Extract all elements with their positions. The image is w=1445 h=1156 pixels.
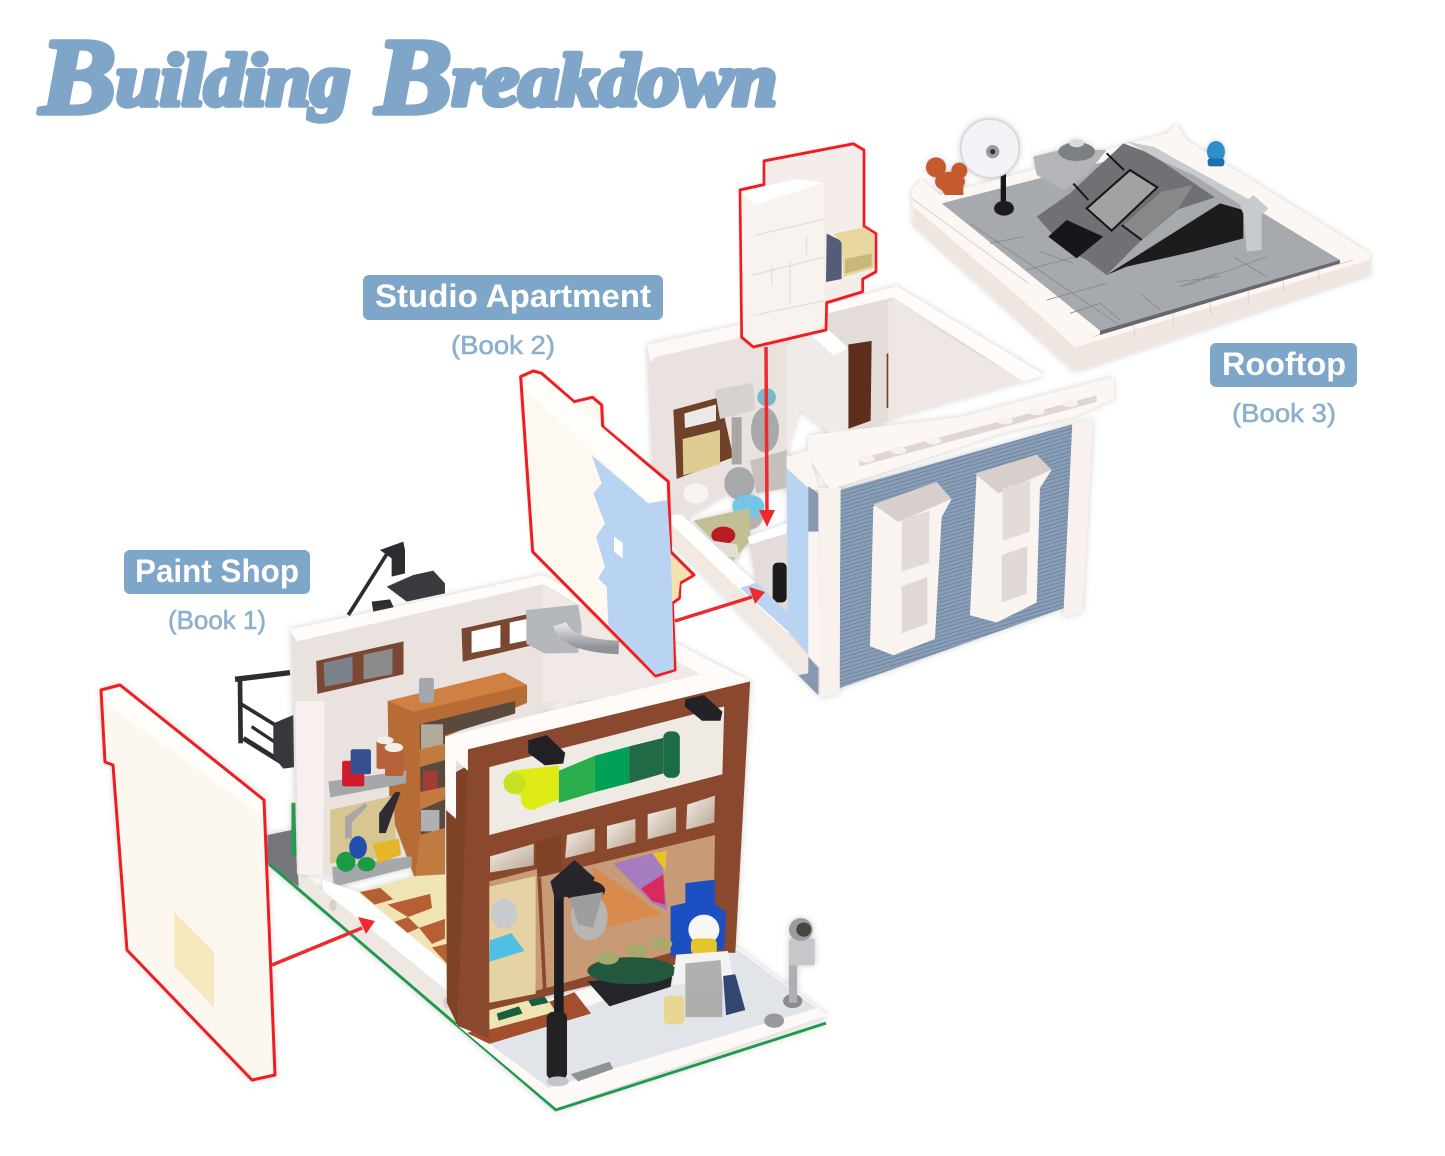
label: Studio Apartment: Studio Apartment <box>375 278 651 314</box>
planter <box>587 938 676 1006</box>
lifted wall: studio apartment <box>521 371 694 676</box>
shop floor brown <box>467 992 591 1044</box>
parapet seam <box>912 198 1353 337</box>
title: uilding <box>116 40 350 122</box>
minifigure <box>664 915 745 1024</box>
sign board <box>489 706 724 835</box>
lifted wall: bathroom partition <box>740 144 876 347</box>
back wall cap <box>647 324 742 363</box>
checker floor <box>358 874 447 965</box>
sidewalk white border <box>456 947 828 1108</box>
left window <box>316 641 404 694</box>
interior right wall <box>888 301 1023 419</box>
title <box>39 18 777 137</box>
grey blue corner pieces <box>808 486 818 532</box>
bookcase <box>388 672 527 880</box>
left pilaster <box>295 701 325 876</box>
bathroom window <box>673 397 733 479</box>
upper wall cap <box>827 286 1045 382</box>
roof outer parapet <box>912 123 1370 372</box>
base green edge <box>269 864 826 1110</box>
parking meter <box>783 918 815 1008</box>
title: reakdown <box>452 40 777 122</box>
roof grooves <box>1072 153 1157 240</box>
street behind <box>267 830 299 887</box>
back wall cap <box>290 575 750 681</box>
low left wall <box>672 523 810 675</box>
duct <box>526 605 619 654</box>
paint shop floor model <box>267 575 828 1110</box>
mailbox <box>671 880 726 956</box>
caption: Book 2: (Book 2) <box>451 330 555 360</box>
paint stripe yellow <box>503 765 559 810</box>
lower cream board <box>330 796 397 864</box>
left pilaster <box>818 488 841 698</box>
wall pin holes <box>329 900 450 1009</box>
low left wall <box>299 874 458 1026</box>
rooftop model <box>912 119 1370 372</box>
door frame line <box>539 878 545 992</box>
door pillar <box>536 835 561 878</box>
right window <box>462 614 530 662</box>
arrow: paint shop wall <box>272 917 375 965</box>
caption: Book 3: (Book 3) <box>1232 398 1336 428</box>
lifted wall: paint shop <box>101 685 275 1080</box>
roof slopes <box>1037 143 1215 275</box>
interior right wall <box>543 585 700 703</box>
label: Rooftop: Rooftop <box>1222 346 1346 382</box>
black hydrant figure <box>773 563 787 603</box>
back wall left <box>647 315 788 524</box>
window two <box>970 455 1052 623</box>
squirrel <box>926 157 967 195</box>
title: B <box>39 18 116 137</box>
toilet cistern and seat <box>715 383 755 419</box>
lower shelf items <box>332 792 412 887</box>
rear wall and door <box>827 299 888 439</box>
plunger <box>711 527 735 544</box>
skylight white edge <box>1127 142 1250 207</box>
caption: Book 1: (Book 1) <box>168 605 266 635</box>
label: Rooftop <box>1210 343 1357 387</box>
blue siding facade <box>840 424 1072 688</box>
brown facade <box>458 681 750 1039</box>
shop window interior <box>489 835 715 1003</box>
roof deck tile lines <box>970 223 1267 323</box>
white corner top <box>787 450 818 490</box>
window one <box>870 482 952 655</box>
paint stripe greens <box>559 731 680 803</box>
sidewalk paving <box>489 949 817 1088</box>
cornice dentils <box>859 400 1078 463</box>
upper window row <box>490 796 715 872</box>
satellite dish <box>961 119 1019 216</box>
sidewalk disc <box>764 1014 784 1028</box>
crane rig behind paint shop <box>235 542 445 769</box>
roof wedge dark side <box>1107 203 1243 275</box>
back wall <box>291 585 556 876</box>
arrow: studio blue wall <box>675 587 765 621</box>
sign clamps <box>528 695 722 765</box>
partition wall <box>787 334 848 452</box>
paint cans <box>342 736 404 786</box>
chimney post <box>1240 195 1268 252</box>
roof deck <box>942 148 1340 331</box>
street grate <box>571 1062 613 1081</box>
studio apartment floor model <box>647 286 1114 698</box>
blue low wall stripe <box>740 583 788 632</box>
white corner <box>445 674 750 819</box>
roof vent box <box>1033 150 1107 190</box>
cornice <box>808 377 1114 492</box>
upper grey shelf <box>328 771 406 797</box>
right pilaster <box>1063 419 1093 617</box>
bathroom floor <box>693 508 750 561</box>
blue bird <box>1207 141 1225 166</box>
arrow: bathroom partition <box>759 347 775 527</box>
title: B <box>375 18 452 137</box>
street lamp <box>547 860 605 1086</box>
label: Paint Shop: Paint Shop <box>135 553 299 589</box>
interior stub wall <box>748 524 787 610</box>
facade left return <box>446 765 468 1026</box>
pale blue corner <box>787 468 808 655</box>
